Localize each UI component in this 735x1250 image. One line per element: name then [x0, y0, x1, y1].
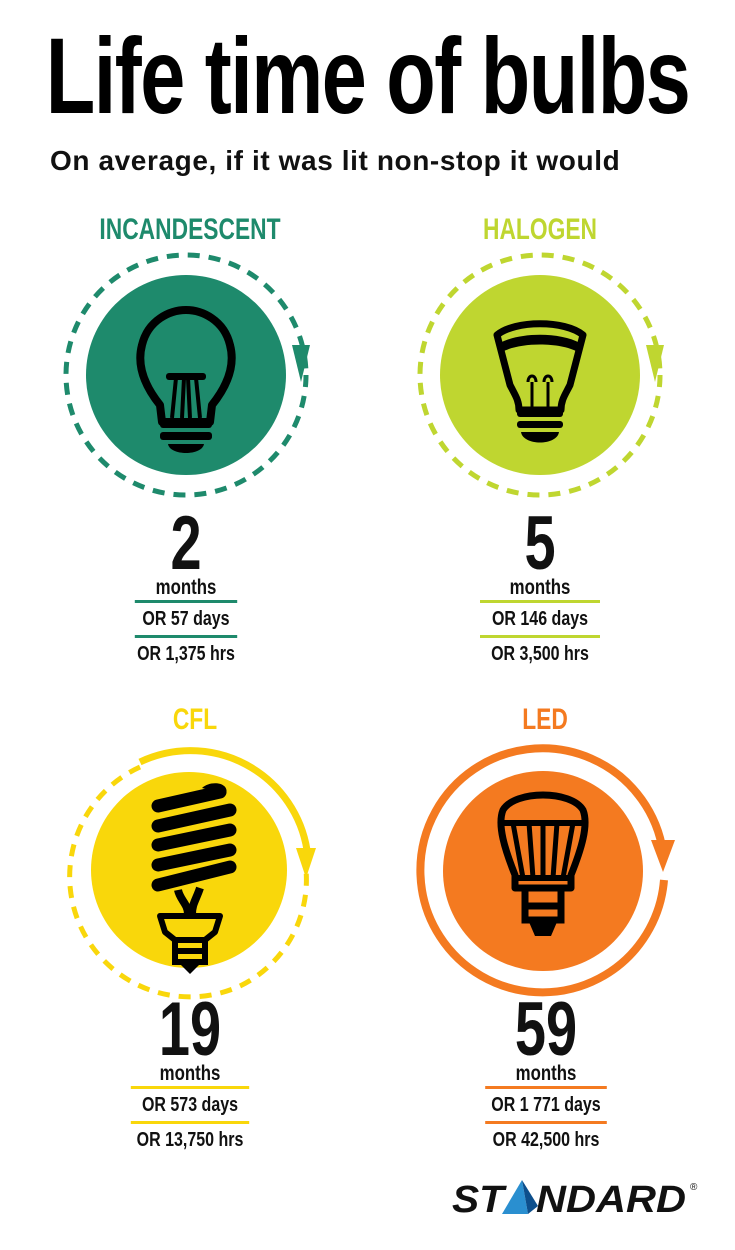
heading: halogen: HALOGEN	[483, 213, 597, 246]
stats: CFL	[130, 987, 250, 1151]
stats: CFL: OR 573 days	[142, 1094, 238, 1116]
logo: STANDARD: ST	[452, 1179, 507, 1220]
logo: STANDARD	[452, 1179, 698, 1220]
stats: LED: months	[516, 1062, 576, 1085]
stats: halogen: OR 3,500 hrs	[491, 643, 589, 665]
stats: halogen: months	[510, 576, 570, 599]
icon: CFL bulb	[67, 747, 316, 1000]
panel: incandescent	[64, 213, 310, 665]
stats: halogen: OR 146 days	[492, 608, 588, 630]
stats: halogen	[480, 501, 600, 665]
stats: LED	[485, 987, 607, 1151]
title: Life time of bulbs	[46, 15, 689, 136]
stats: LED: 59	[515, 987, 577, 1072]
stats: incandescent: 2	[170, 501, 202, 586]
stats: CFL: OR 13,750 hrs	[137, 1129, 243, 1151]
icon: halogen bulb	[418, 252, 664, 498]
stats: LED: OR 42,500 hrs	[493, 1129, 599, 1151]
logo: STANDARD: ®	[690, 1182, 698, 1193]
panel: CFL	[67, 703, 316, 1151]
icon: incandescent bulb	[64, 252, 310, 498]
stats: incandescent: months	[156, 576, 216, 599]
subtitle: On average, if it was lit non-stop it would	[50, 145, 620, 176]
stats: CFL: 19	[159, 987, 221, 1072]
heading: CFL: CFL	[173, 703, 217, 736]
icon: LED bulb	[416, 744, 675, 996]
panel: halogen	[418, 213, 664, 665]
stats: incandescent: OR 57 days	[142, 608, 230, 630]
stats: CFL: months	[160, 1062, 220, 1085]
stats: LED: OR 1 771 days	[491, 1094, 601, 1116]
logo: STANDARD: NDARD	[536, 1179, 686, 1220]
stats: incandescent: OR 1,375 hrs	[137, 643, 235, 665]
heading: incandescent: INCANDESCENT	[99, 213, 281, 246]
heading: LED: LED	[522, 703, 568, 736]
panel: LED	[416, 703, 675, 1151]
stats: incandescent	[134, 501, 238, 665]
stats: halogen: 5	[524, 501, 556, 586]
